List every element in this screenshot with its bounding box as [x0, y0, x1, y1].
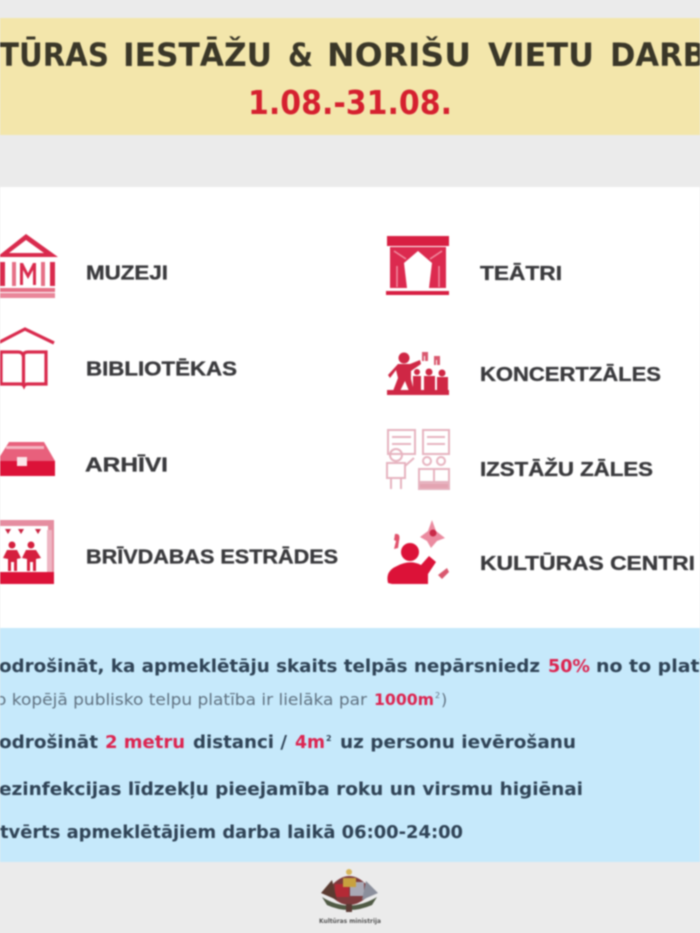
icon: open-air stage: [0, 520, 54, 584]
requirement: disinfectant: ezinfekcijas līdzekļu pieejamība roku un virsmu higiēnai: [0, 780, 583, 800]
icon: archive: [0, 442, 55, 476]
requirement note: area: 2: [435, 691, 440, 700]
requirement: distance: 4m: [295, 733, 325, 753]
label: arhivi: ARHĪVI: [85, 454, 168, 476]
panel: venue types: [0, 187, 700, 628]
date range: 1.08.-31.08.: [248, 83, 452, 122]
icon: coat of arms: [321, 869, 378, 912]
title: IESTĀŽU: [123, 36, 272, 74]
label: teatri: TEĀTRI: [480, 263, 562, 285]
title: &: [288, 36, 313, 74]
requirement: opening hours: tvērts apmeklētājiem darba laikā 06:00-24:00: [0, 823, 463, 843]
label: brivdabas estrades: BRĪVDABAS ESTRĀDES: [86, 546, 338, 568]
panel: title band: [0, 18, 700, 135]
requirement: visitor limit: odrošināt, ka apmeklētāju skaits telpās nepārsniedz: [0, 657, 540, 677]
requirement note: area: o kopējā publisko telpu platība ir lielāka par: [0, 690, 367, 709]
icon: theatre: [386, 236, 449, 295]
requirement note: area: ): [441, 690, 447, 709]
label: kulturas centri: KULTŪRAS CENTRI: [480, 553, 695, 575]
label: koncertzales: KONCERTZĀLES: [480, 364, 661, 386]
icon: exhibition hall: [387, 430, 449, 489]
icon: library: [0, 329, 54, 386]
title: NORIŠU: [327, 35, 471, 74]
panel: requirements: [0, 628, 700, 862]
requirement: visitor limit: no to platī: [596, 657, 700, 677]
label: muzeji: MUZEJI: [86, 262, 168, 284]
requirement: distance: distanci /: [193, 733, 288, 753]
requirement: distance: 2: [326, 734, 332, 743]
label: bibliotekas: BIBLIOTĒKAS: [86, 358, 237, 380]
icon: concert hall: [387, 352, 449, 395]
requirement: distance: odrošināt: [0, 733, 98, 753]
title: [0, 35, 700, 74]
icon: culture centre: [387, 520, 449, 584]
requirement: distance: uz personu ievērošanu: [340, 733, 576, 753]
footer: ministry name: Kultūras ministrija: [319, 918, 381, 925]
requirement: distance: 2 metru: [105, 733, 185, 753]
label: izstazu zales: IZSTĀŽU ZĀLES: [480, 457, 653, 481]
icon: museum: [0, 234, 58, 298]
title: TŪRAS: [0, 36, 109, 74]
requirement note: area: 1000m: [374, 690, 434, 709]
requirement: visitor limit: 50%: [548, 657, 590, 677]
requirement: distance: [0, 733, 576, 753]
title: VIETU: [488, 36, 594, 74]
